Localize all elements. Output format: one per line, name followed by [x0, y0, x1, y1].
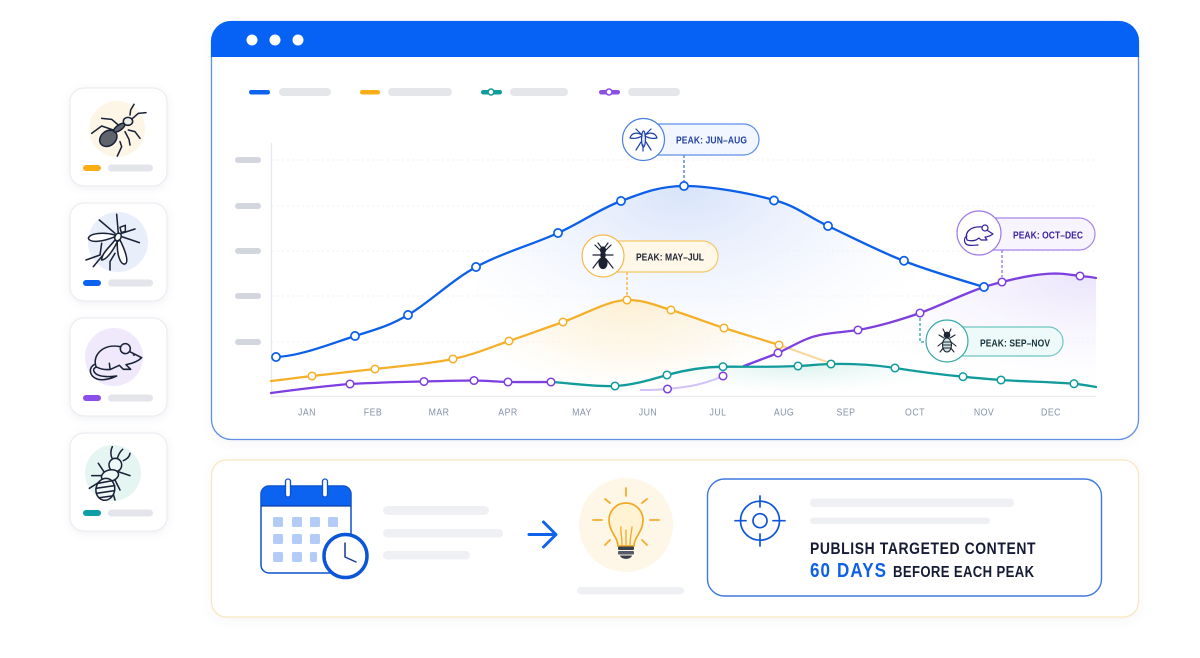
card: ant	[70, 88, 167, 186]
window dots	[246, 34, 304, 46]
x axis month labels: MAR	[429, 406, 449, 418]
arrow	[529, 522, 556, 547]
series: ant (yellow)	[271, 300, 830, 381]
callout box: publish targeted content	[708, 479, 1102, 596]
x axis month labels: JAN	[298, 406, 316, 418]
placeholder text lines	[383, 506, 503, 560]
callout text	[810, 540, 1036, 581]
x axis month labels: APR	[498, 406, 518, 418]
markers: teal	[611, 360, 1078, 390]
callout: mosquito peak: PEAK: JUN–AUG	[676, 135, 747, 146]
card: rat	[70, 318, 167, 416]
series: mosquito (blue)	[276, 186, 984, 357]
panel: browser chart window	[211, 21, 1139, 440]
panel: bottom workflow	[212, 460, 1138, 617]
y axis labels	[235, 157, 261, 345]
x axis month labels: FEB	[364, 406, 382, 418]
x axis month labels	[298, 406, 1061, 418]
series: rat (purple)	[271, 274, 1096, 393]
line chart	[271, 182, 1096, 396]
x axis month labels: JUN	[639, 406, 657, 418]
callout: termite peak	[920, 318, 1063, 362]
placeholder caption	[577, 587, 684, 594]
markers: purple	[346, 272, 1084, 393]
placeholder lines	[810, 498, 1014, 507]
callout: ant peak	[582, 235, 718, 295]
callout text: PUBLISH TARGETED CONTENT	[810, 540, 1036, 558]
icon: target	[735, 496, 785, 546]
window header bar	[211, 21, 1139, 57]
markers: yellow	[308, 296, 783, 380]
x axis month labels: AUG	[774, 406, 794, 418]
icon: light bulb	[579, 478, 673, 572]
x axis month labels: NOV	[974, 406, 994, 418]
x axis month labels: MAY	[572, 406, 592, 418]
series: termite (teal)	[551, 364, 1096, 387]
x axis month labels: DEC	[1041, 406, 1061, 418]
x axis month labels: OCT	[905, 406, 925, 418]
callout text: 60 DAYS	[810, 559, 886, 581]
card: termite	[70, 433, 167, 531]
callout: rat peak: PEAK: OCT–DEC	[1013, 230, 1083, 241]
chart legend	[249, 88, 680, 96]
callout: mosquito peak	[622, 118, 759, 181]
callout: ant peak: PEAK: MAY–JUL	[636, 252, 704, 263]
area fills	[453, 186, 1096, 396]
callout: rat peak	[957, 211, 1095, 277]
markers: blue	[272, 182, 988, 361]
callout: termite peak: PEAK: SEP–NOV	[980, 338, 1051, 349]
card: mosquito	[70, 203, 167, 301]
icon: calendar with clock	[261, 479, 367, 578]
callout text: BEFORE EACH PEAK	[893, 564, 1034, 581]
x axis month labels: JUL	[710, 406, 726, 418]
x axis month labels: SEP	[837, 406, 855, 418]
panel: pest sidebar	[70, 88, 167, 531]
